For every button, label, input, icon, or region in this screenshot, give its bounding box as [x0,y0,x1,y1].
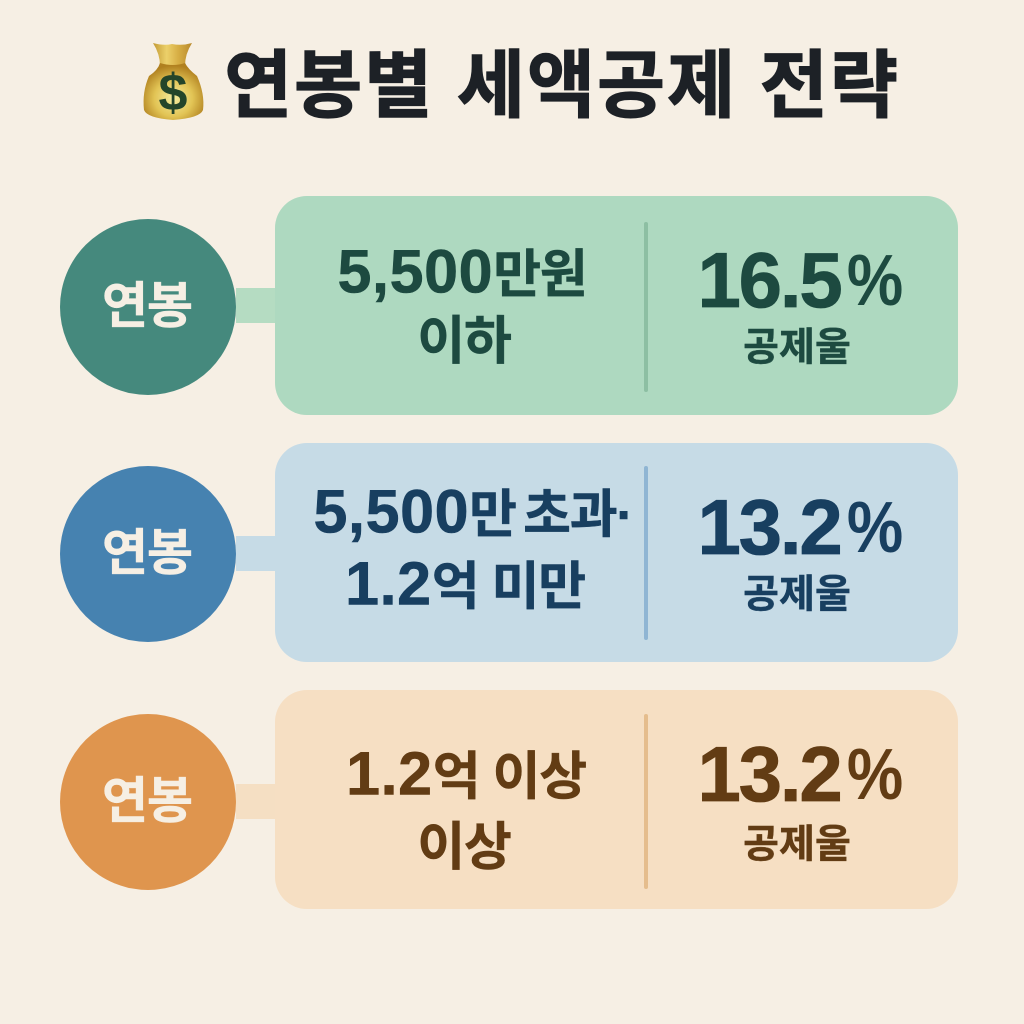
title: 연봉별 세액공제 전략 [224,44,900,127]
rate 3: 13.2 [697,730,841,818]
row 1: 5,500만원 이하 [60,196,958,415]
circle label 3: 연봉 [102,773,192,829]
connector 1 [236,288,278,323]
rate 2 percent: % [847,488,903,568]
icon: money bag [144,43,204,122]
rate caption 3: 공제울 [743,824,851,866]
divider 2 [644,466,648,640]
divider 3 [644,714,648,889]
circle badge 3 [60,714,236,890]
connector 2 [236,536,278,571]
salary range 1: 5,500만원 [338,238,586,306]
circle label 2: 연봉 [102,525,192,581]
salary range 3 second line: 이상 [417,819,511,877]
salary range 2 second line: 1.2억 미만 [345,550,585,618]
circle badge 1 [60,219,236,395]
divider 1 [644,222,648,392]
row 3: 1.2억 이상 [60,690,958,909]
salary range 1 second line: 이하 [417,313,511,371]
rate 1: 16.5 [697,236,841,324]
connector 3 [236,784,278,819]
row 2: 5,500만 초과 1.2억 미만 [60,443,958,662]
circle label 1: 연봉 [102,278,192,334]
panel 2 [275,443,958,662]
icon: money bag: $ [159,64,188,122]
rate 2: 13.2 [697,483,841,571]
rate caption 1: 공제울 [743,326,851,370]
panel 1 [275,196,958,415]
salary range 2: 5,500만 초과· [314,478,632,546]
salary range 3: 1.2억 이상 [346,740,586,808]
rate 1 percent: % [847,241,903,321]
rate caption 2: 공제울 [743,574,851,616]
rate 3 percent: % [847,735,903,815]
circle badge 2 [60,466,236,642]
panel 3 [275,690,958,909]
